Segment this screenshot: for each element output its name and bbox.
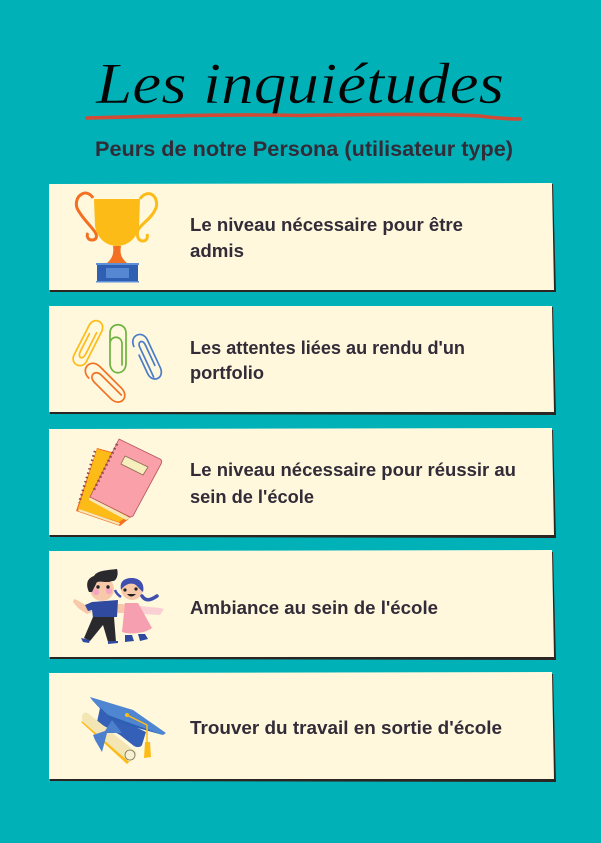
card text: Trouver du travail en sortie d'école <box>190 718 502 738</box>
card text <box>190 338 465 383</box>
card text: Le niveau nécessaire pour être <box>190 215 463 235</box>
title underline <box>87 114 520 119</box>
card text: Le niveau nécessaire pour réussir au <box>190 460 516 480</box>
card text: sein de l'école <box>190 487 314 507</box>
icon: trophy <box>76 193 157 282</box>
panel: niveau pour être admis <box>49 183 556 292</box>
card text: Ambiance au sein de l'école <box>190 598 438 618</box>
subtitle: Peurs de notre Persona (utilisateur type) <box>95 138 513 161</box>
panel: travail en sortie d'école <box>49 672 556 782</box>
panel: rendu d'un portfolio <box>49 306 556 415</box>
title: Les inquiétudes <box>95 51 504 116</box>
icon: graduation cap and diploma <box>81 697 166 764</box>
card text: Les attentes liées au rendu d'un <box>190 338 465 358</box>
panel: ambiance <box>49 550 556 660</box>
panel: niveau pour réussir <box>49 428 556 538</box>
icon: paper clips <box>71 318 164 406</box>
card text: portfolio <box>190 363 264 383</box>
icon: two children <box>73 569 164 644</box>
card text <box>190 215 463 261</box>
card text <box>190 460 516 507</box>
icon: notebooks <box>76 439 162 526</box>
card text: admis <box>190 241 244 261</box>
